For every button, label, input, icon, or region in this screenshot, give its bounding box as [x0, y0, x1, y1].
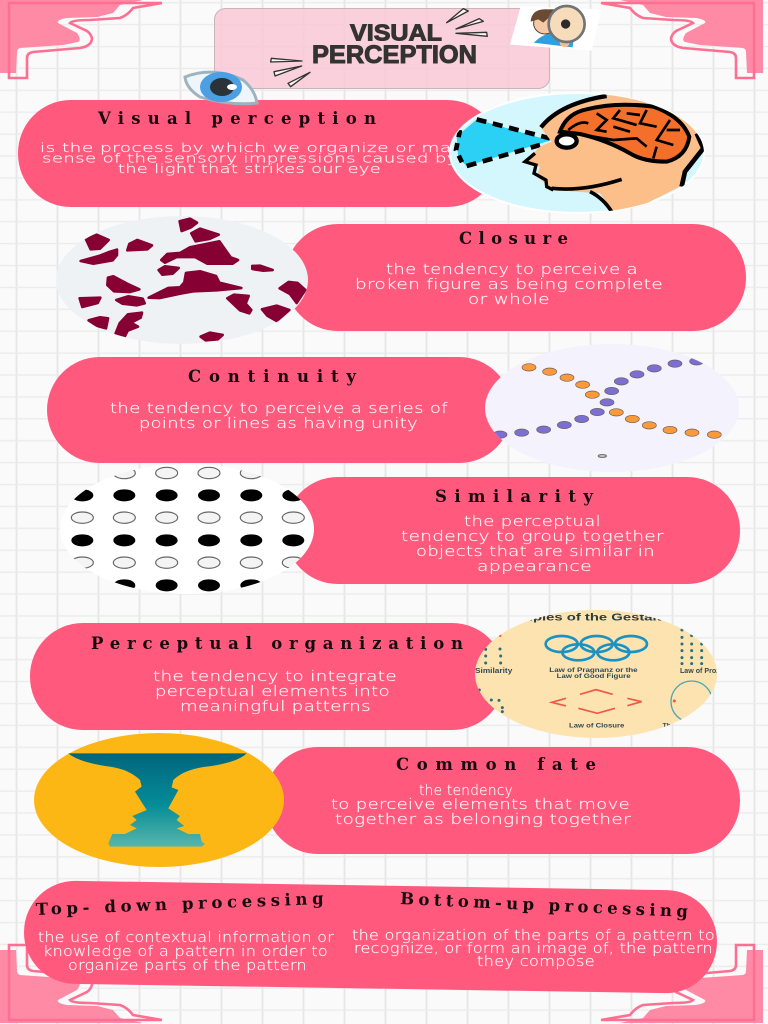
definition: bottom-up: the organization of the parts of a pattern to [352, 928, 715, 944]
definition text [40, 140, 474, 176]
illustration: gestalt principles poster: Law of Closure [569, 723, 625, 730]
heading: Common fate [396, 755, 596, 774]
pill background [47, 357, 512, 463]
definition text [331, 783, 631, 828]
definition text: the tendency [419, 783, 513, 799]
icon: emphasis bursts [271, 9, 487, 87]
illustration: faces and vase [34, 733, 284, 867]
pill background [18, 100, 500, 207]
definition text: appearance [477, 559, 592, 575]
heading: top-down processing: Top- down processing [35, 889, 324, 919]
illustration: dot grid [60, 464, 314, 594]
corner ornament: bottom right [601, 945, 763, 1023]
definition: top-down [38, 930, 334, 974]
illustration: crossing dotted lines [485, 344, 739, 472]
definition text: points or lines as having unity [139, 416, 418, 432]
definition text: or whole [468, 292, 550, 308]
definition text: the tendency to perceive a series of [110, 401, 448, 417]
title text [312, 20, 477, 69]
illustration: gestalt principles poster: Law of Pragnanz or the [549, 667, 638, 674]
definition text: together as belonging together [335, 812, 631, 828]
title banner [214, 8, 550, 88]
definition text [355, 262, 663, 308]
definition text: the tendency to integrate [153, 669, 397, 685]
definition: top-down: knowledge of a pattern in order to [43, 944, 328, 960]
definition: bottom-up: recognize, or form an image of, the pattern [354, 941, 713, 957]
panel: visual perception [18, 93, 704, 213]
heading: Similarity [435, 487, 593, 506]
illustration: gestalt principles poster: Law of Good Figure [557, 673, 631, 680]
pill background [30, 623, 505, 730]
pill background [285, 477, 740, 584]
definition text: the tendency to perceive a [386, 262, 638, 278]
definition text: sense of the sensory impressions caused by [42, 150, 458, 166]
illustration: broken figure blobs [56, 216, 308, 344]
heading: bottom-up processing: Bottom-up processing [400, 889, 689, 921]
heading: Visual perception [97, 109, 376, 128]
panel: perceptual organization [30, 610, 737, 738]
illustration: gestalt principles poster [475, 610, 737, 738]
definition text: perceptual elements into [155, 684, 390, 700]
definition text [153, 669, 397, 715]
title text: VISUAL [350, 20, 442, 46]
panel: similarity [60, 464, 740, 594]
definition text: objects that are similar in [416, 544, 655, 560]
definition: bottom-up [352, 928, 715, 970]
corner ornament: top right [601, 0, 763, 78]
definition text: broken figure as being complete [355, 277, 663, 293]
pill background [23, 880, 718, 994]
panel: continuity [47, 344, 739, 472]
heading: Perceptual organization [91, 634, 463, 653]
illustration: gestalt principles poster: Similarity [475, 668, 512, 675]
illustration: gestalt principles poster: The [663, 723, 675, 730]
corner ornament: bottom left [0, 945, 162, 1023]
heading: Closure [459, 229, 568, 248]
definition text: is the process by which we organize or make [40, 140, 474, 155]
definition: top-down: the use of contextual information or [38, 930, 334, 946]
illustration: gestalt principles poster: Law of Proximity [680, 668, 737, 675]
heading: Continuity [188, 367, 356, 386]
pill background [285, 224, 746, 331]
panel: common fate [34, 733, 740, 867]
definition: top-down: organize parts of the pattern [68, 958, 307, 974]
panel: top-down and bottom-up processing [23, 880, 718, 994]
corner ornament: top left [0, 0, 162, 78]
definition: bottom-up: they compose [477, 954, 595, 970]
illustration: gestalt principles poster: Examples of the Gestalt [493, 612, 663, 623]
definition text: meaningful patterns [180, 699, 371, 715]
definition text: to perceive elements that move [331, 797, 630, 813]
definition text: the perceptual [464, 514, 601, 530]
icon: detective with magnifying glass [510, 6, 602, 51]
title text: PERCEPTION [312, 41, 477, 69]
definition text [110, 401, 448, 432]
definition text: tendency to group together [401, 529, 664, 545]
definition text: the light that strikes our eye [118, 161, 381, 176]
illustration: head with brain and vision cone [450, 93, 704, 213]
definition text [401, 514, 664, 575]
panel: closure [56, 216, 746, 344]
icon: eye [185, 72, 257, 104]
pill background [265, 747, 740, 854]
